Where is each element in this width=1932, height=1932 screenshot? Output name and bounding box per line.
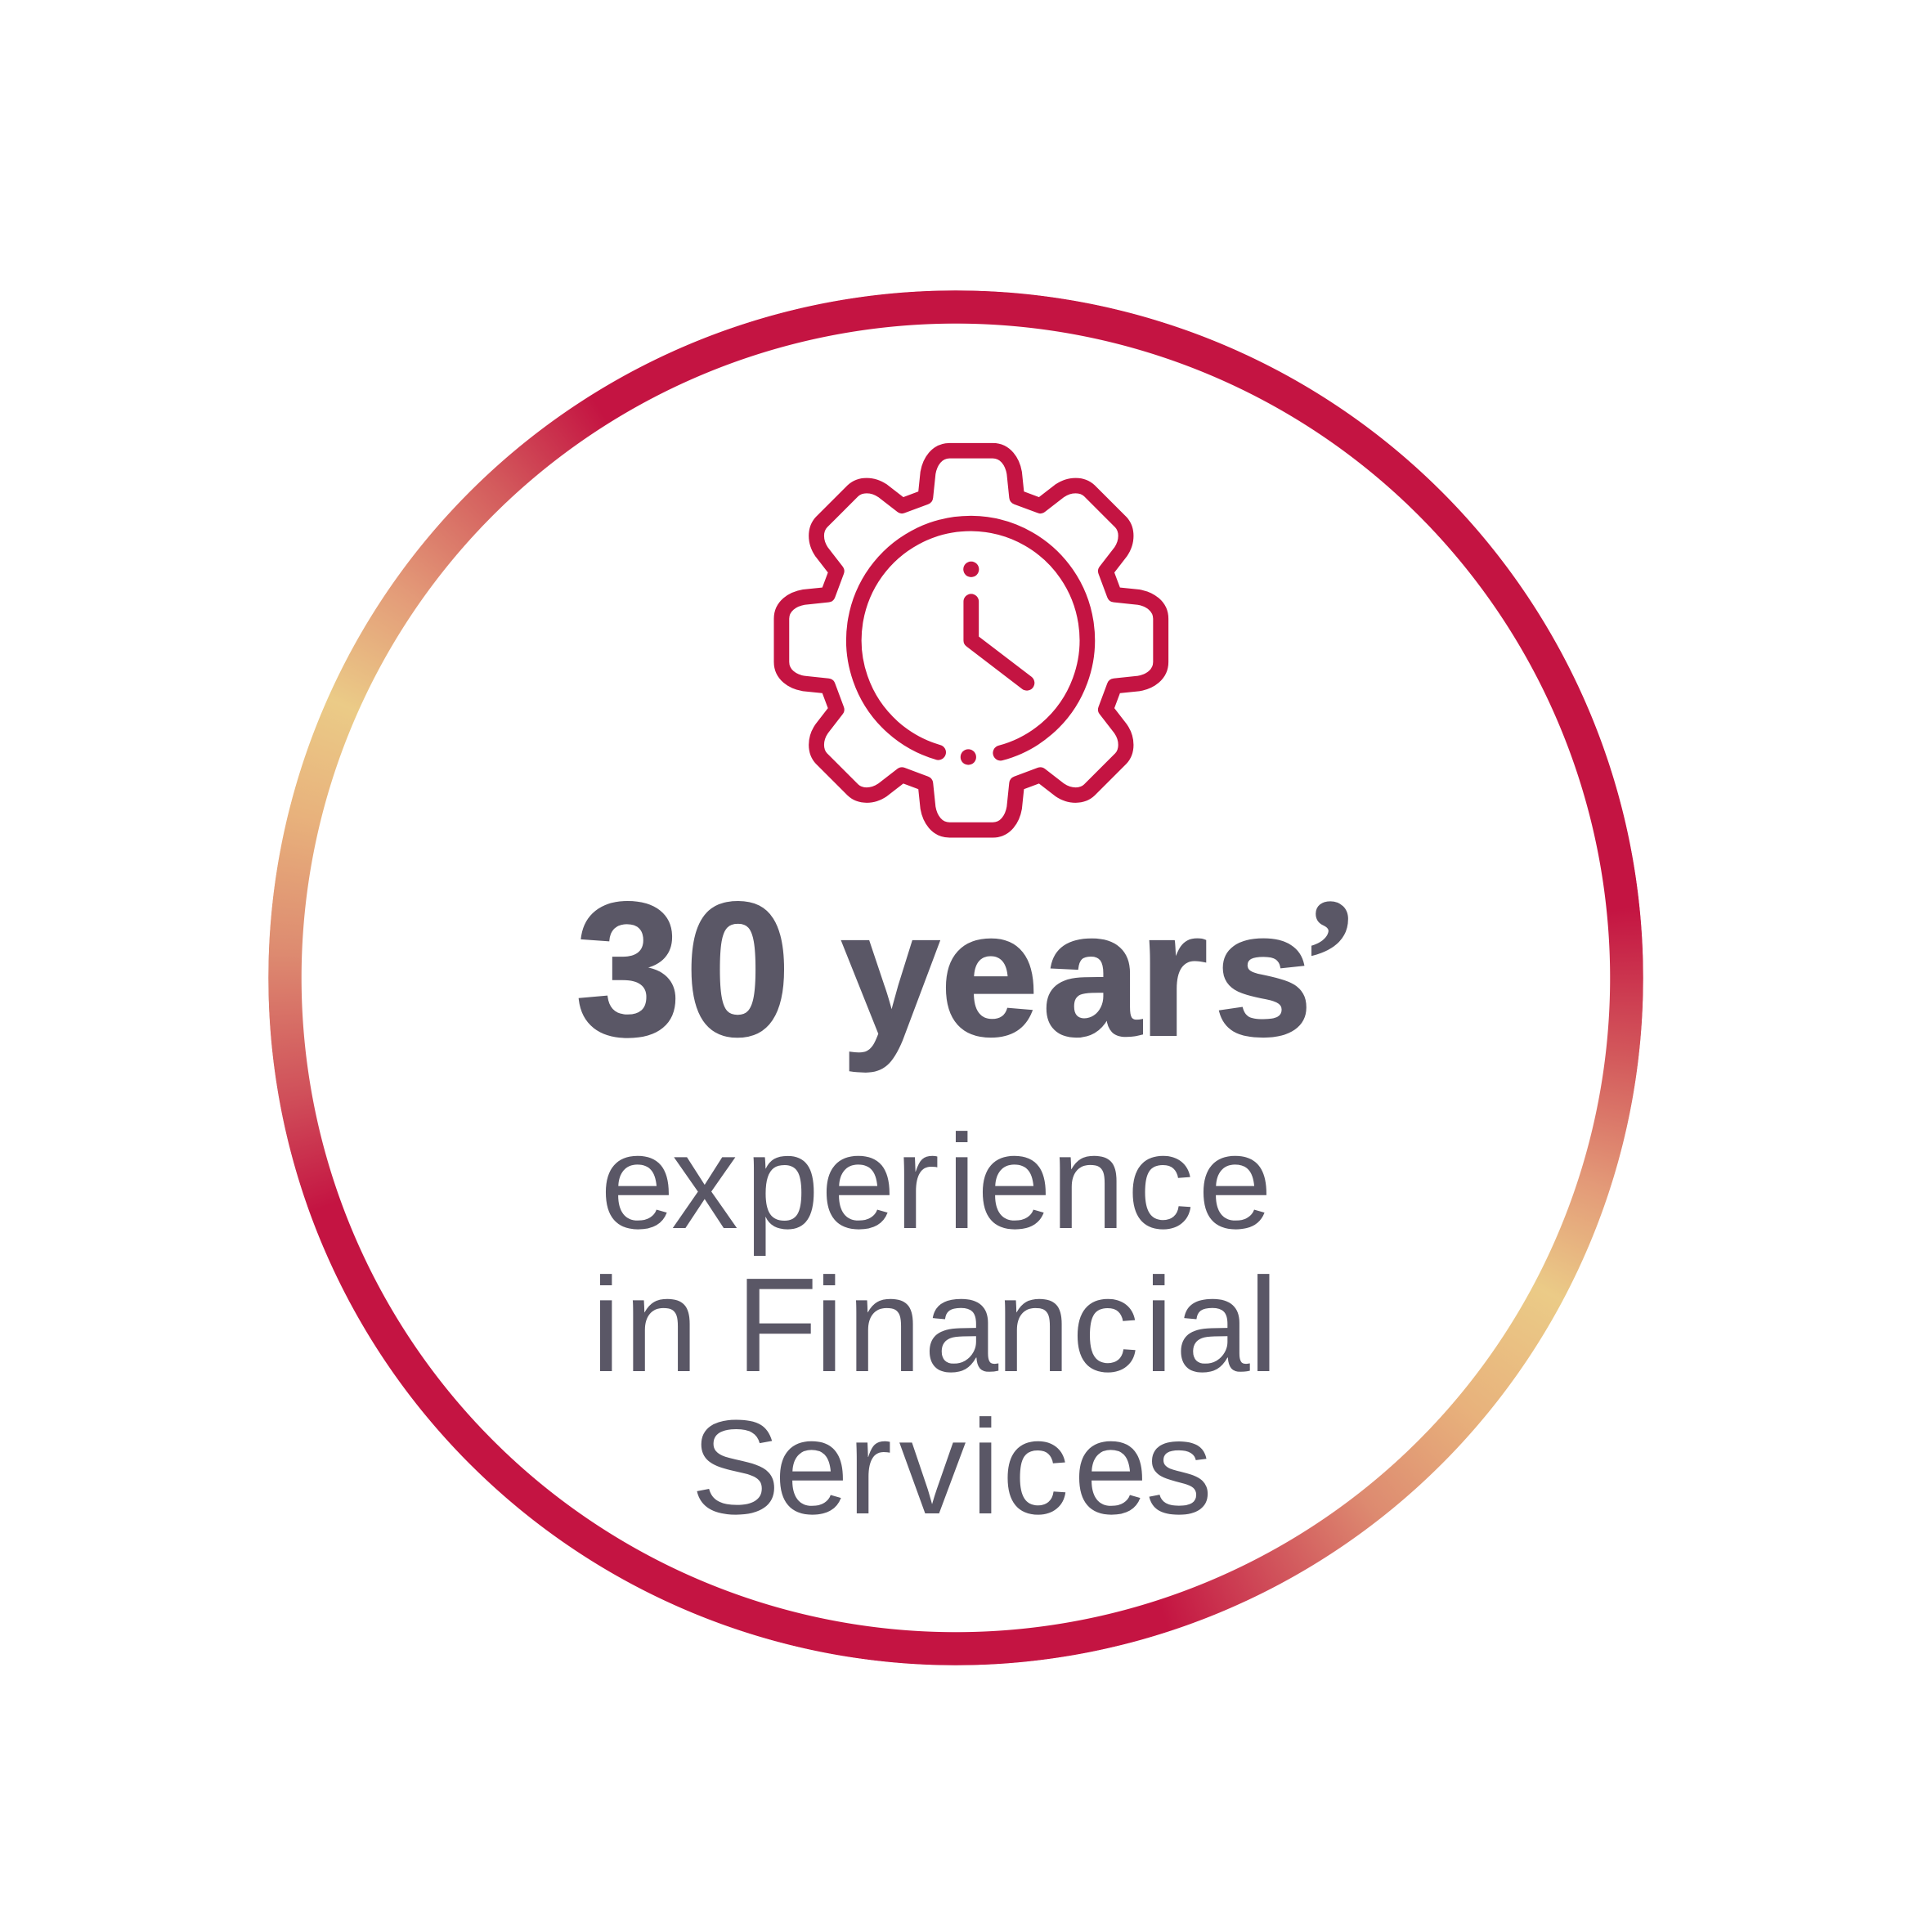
text line: in Financial: in <box>591 1250 698 1400</box>
heading: 30 years': 30 <box>576 863 791 1076</box>
text line: in Financial: Financial <box>736 1250 1278 1400</box>
clock top dot <box>963 562 979 577</box>
heading: 30 years': years <box>841 875 1312 1073</box>
gear outline <box>782 451 1161 830</box>
icon: gear with clock <box>782 451 1161 830</box>
clock hands <box>971 602 1027 683</box>
heading: 30 years': ’ <box>1302 865 1359 1055</box>
text line: Services: Services <box>691 1392 1213 1542</box>
gradient ring <box>268 290 1643 1665</box>
text line: experience: experience <box>600 1107 1272 1257</box>
clock bottom dot <box>961 749 976 765</box>
clock face arc <box>854 523 1087 753</box>
heading: 30 years' <box>576 863 1359 1076</box>
